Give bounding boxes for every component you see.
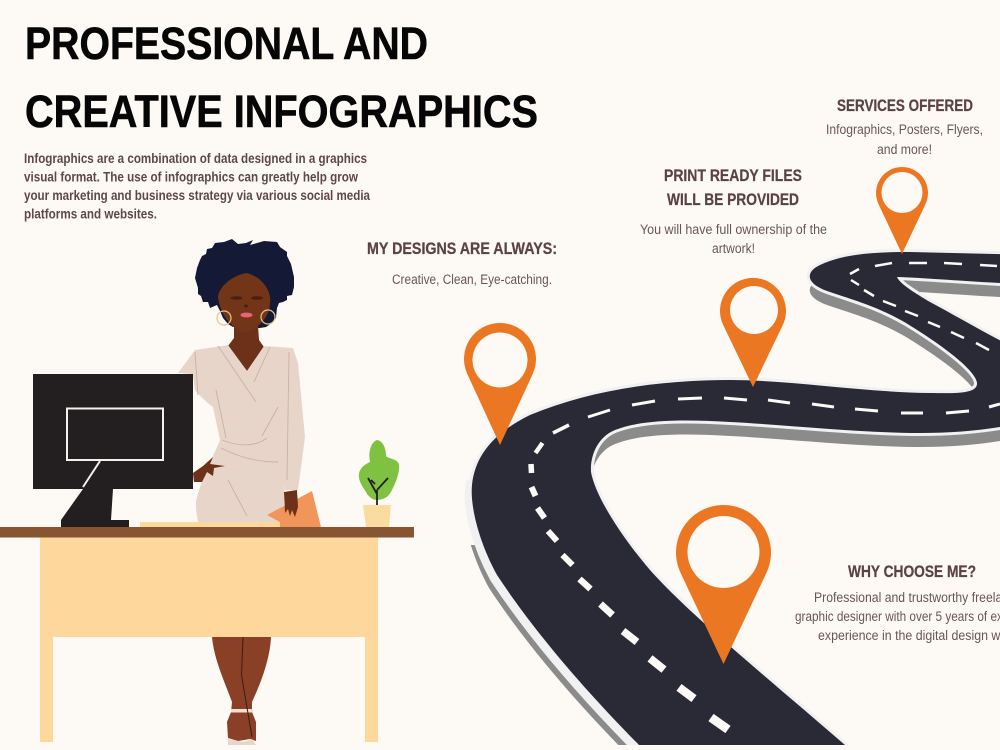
hand on hip: [193, 457, 225, 482]
callout: print ready files: artwork!: [712, 241, 755, 256]
intro text block: platforms and websites.: [24, 206, 157, 222]
callout: my designs: [367, 240, 557, 287]
callout: why choose me: [795, 563, 1000, 643]
callout: services offered: SERVICES OFFERED: [837, 97, 973, 115]
title: PROFESSIONAL AND: [25, 18, 428, 69]
callout: my designs: MY DESIGNS ARE ALWAYS:: [367, 240, 557, 258]
neck: [228, 325, 264, 371]
road shadow, lower left: [470, 545, 626, 745]
intro text block: your marketing and business strategy via various social media: [24, 188, 370, 203]
road edge, outer offset: [465, 480, 635, 745]
pot: [363, 505, 391, 527]
desk body and legs: [40, 537, 378, 742]
pin 1: [464, 323, 536, 445]
legs: [212, 637, 271, 745]
dress: [178, 345, 305, 523]
callout: why choose me: WHY CHOOSE ME?: [848, 563, 976, 581]
road surface: [472, 252, 1000, 745]
callout: my designs: Creative, Clean, Eye-catching.: [392, 272, 552, 287]
desk: [0, 527, 414, 742]
intro text block: [24, 151, 370, 222]
screen: [33, 374, 193, 489]
folder: [267, 491, 321, 527]
leaves: [359, 440, 399, 500]
road shadow: [594, 280, 1000, 466]
computer monitor: [33, 374, 193, 527]
title: CREATIVE INFOGRAPHICS: [25, 86, 538, 137]
stand highlight: [83, 461, 100, 487]
earrings: [217, 310, 275, 325]
stand: [61, 489, 129, 527]
callout: services offered: [826, 97, 983, 157]
callout: print ready files: PRINT READY FILES: [664, 167, 802, 185]
screen frame: [67, 408, 163, 460]
pin 2: [720, 278, 786, 387]
keyboard: [140, 522, 280, 528]
hand over folder: [284, 490, 298, 517]
intro text block: Infographics are a combination of data designed in a graphics: [24, 151, 367, 166]
road centre dashes: [531, 263, 1000, 730]
callout: print ready files: You will have full ownership of the: [640, 222, 827, 237]
road: [464, 252, 1000, 750]
woman figure: [178, 239, 305, 745]
intro text block: visual format. The use of infographics can greatly help grow: [24, 170, 358, 184]
lips: [240, 313, 252, 317]
callout: services offered: and more!: [877, 142, 932, 157]
road edge: [472, 252, 1000, 745]
hair: [195, 239, 294, 328]
plant: [359, 440, 399, 527]
desk top: [0, 527, 414, 538]
pin 4: [676, 505, 771, 664]
callout: services offered: Infographics, Posters, Flyers,: [826, 122, 983, 137]
stem: [368, 478, 388, 505]
pin 3: [876, 167, 928, 254]
face: [218, 273, 270, 332]
dress folds: [195, 346, 289, 516]
title: [25, 18, 538, 137]
eyes and nose: [230, 296, 263, 308]
callout: print ready files: WILL BE PROVIDED: [667, 191, 799, 209]
callout: print ready files: [640, 167, 827, 256]
